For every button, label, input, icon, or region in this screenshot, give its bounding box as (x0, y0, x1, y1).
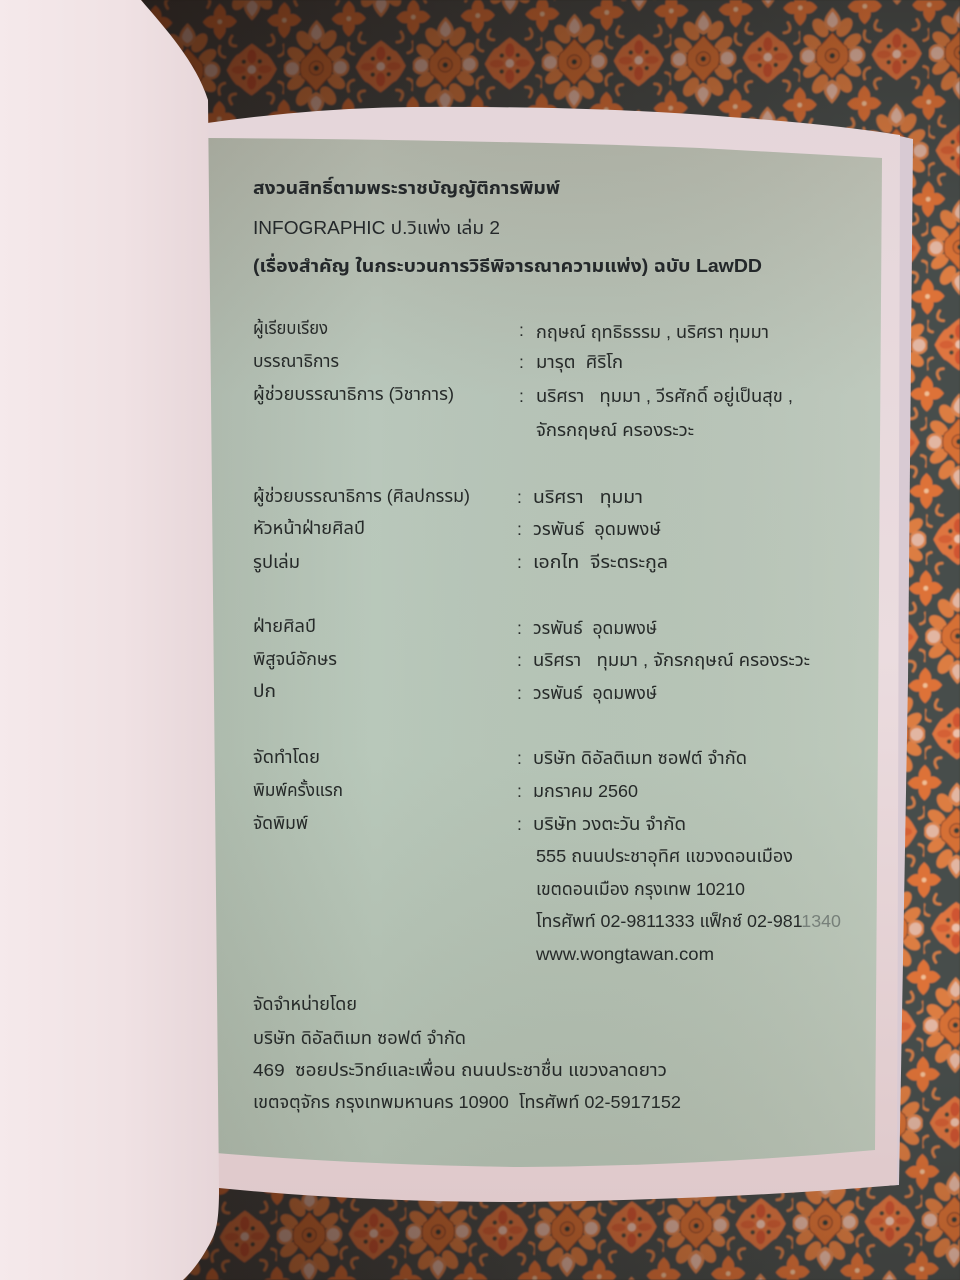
book title: INFOGRAPHIC ป.วิแพ่ง เล่ม 2 (253, 218, 500, 238)
credits group 3: : (517, 683, 522, 703)
publisher details: : (517, 814, 522, 834)
credits group 3: : (517, 650, 522, 670)
credits group 2 (253, 486, 668, 574)
credits group 1 (253, 318, 793, 440)
credits group 3: วรพันธ์ อุดมพงษ์ (533, 618, 657, 639)
credits group 2: รูปเล่ม (253, 552, 300, 574)
book title: (เรื่องสำคัญ ในกระบวนการวิธีพิจารณาความแพ่ง) ฉบับ LawDD (253, 253, 762, 276)
credits group 2: เอกไท จีระตระกูล (533, 552, 668, 574)
publisher details: บริษัท วงตะวัน จำกัด (533, 814, 686, 834)
publisher details: จัดพิมพ์ (253, 813, 308, 833)
credits group 1: ผู้ช่วยบรรณาธิการ (วิชาการ) (253, 384, 454, 406)
credits group 2: หัวหน้าฝ่ายศิลป์ (253, 518, 365, 538)
publisher details: : (517, 781, 522, 801)
publisher details: บริษัท ดิอัลติเมท ซอฟต์ จำกัด (533, 748, 747, 768)
credits group 1: จักรกฤษณ์ ครองระวะ (536, 420, 694, 440)
publisher details: จัดทำโดย (253, 747, 320, 767)
distributor details (253, 994, 681, 1113)
credits group 2: : (517, 487, 522, 507)
credits group 3: : (517, 618, 522, 638)
right book page (200, 107, 900, 1202)
credits group 1: นริศรา ทุมมา , วีรศักดิ์ อยู่เป็นสุข , (536, 386, 793, 408)
book title: สงวนสิทธิ์ตามพระราชบัญญัติการพิมพ์ (253, 176, 560, 198)
distributor details: 469 ซอยประวิทย์และเพื่อน ถนนประชาชื่น แขวงลาดยาว (253, 1058, 667, 1080)
credits group 1: : (519, 320, 524, 340)
distributor details: จัดจำหน่ายโดย (253, 994, 357, 1014)
distributor details: เขตจตุจักร กรุงเทพมหานคร 10900 โทรศัพท์ 02-5917152 (253, 1092, 681, 1113)
credits group 3: พิสูจน์อักษร (253, 649, 337, 671)
credits group 1: บรรณาธิการ (253, 351, 339, 371)
credits group 2: นริศรา ทุมมา (533, 487, 643, 508)
publisher details: มกราคม 2560 (533, 781, 638, 801)
credits group 2: วรพันธ์ อุดมพงษ์ (533, 519, 661, 540)
publisher details: พิมพ์ครั้งแรก (253, 779, 343, 800)
book title (253, 176, 762, 276)
publisher details (253, 747, 841, 964)
publisher details: 555 ถนนประชาอุทิศ แขวงดอนเมือง (536, 846, 793, 867)
publisher details: โทรศัพท์ 02-9811333 แฟ็กซ์ 02-981 1340 (536, 911, 841, 931)
credits group 1: : (519, 386, 524, 406)
credits group 3: วรพันธ์ อุดมพงษ์ (533, 683, 657, 704)
credits group 3: ฝ่ายศิลป์ (253, 616, 316, 636)
credits group 1: มารุต ศิริโก (536, 352, 623, 373)
left blank book page (0, 0, 219, 1280)
credits group 3: ปก (253, 681, 276, 701)
credits group 2: : (517, 519, 522, 539)
publisher details: www.wongtawan.com (535, 944, 714, 964)
credits group 1: ผู้เรียบเรียง (253, 318, 328, 340)
publisher details: เขตดอนเมือง กรุงเทพ 10210 (536, 879, 745, 900)
back sheet edge of the book (880, 135, 913, 1186)
distributor details: บริษัท ดิอัลติเมท ซอฟต์ จำกัด (253, 1028, 466, 1048)
credits group 2: : (517, 552, 522, 572)
credits group 1: : (519, 352, 524, 372)
credits group 2: ผู้ช่วยบรรณาธิการ (ศิลปกรรม) (253, 486, 470, 508)
credits group 3 (253, 616, 810, 704)
green page panel (205, 138, 882, 1167)
publisher details: : (517, 748, 522, 768)
credits group 1: กฤษณ์ ฤทธิธรรม , นริศรา ทุมมา (536, 322, 769, 343)
credits group 3: นริศรา ทุมมา , จักรกฤษณ์ ครองระวะ (533, 650, 810, 671)
